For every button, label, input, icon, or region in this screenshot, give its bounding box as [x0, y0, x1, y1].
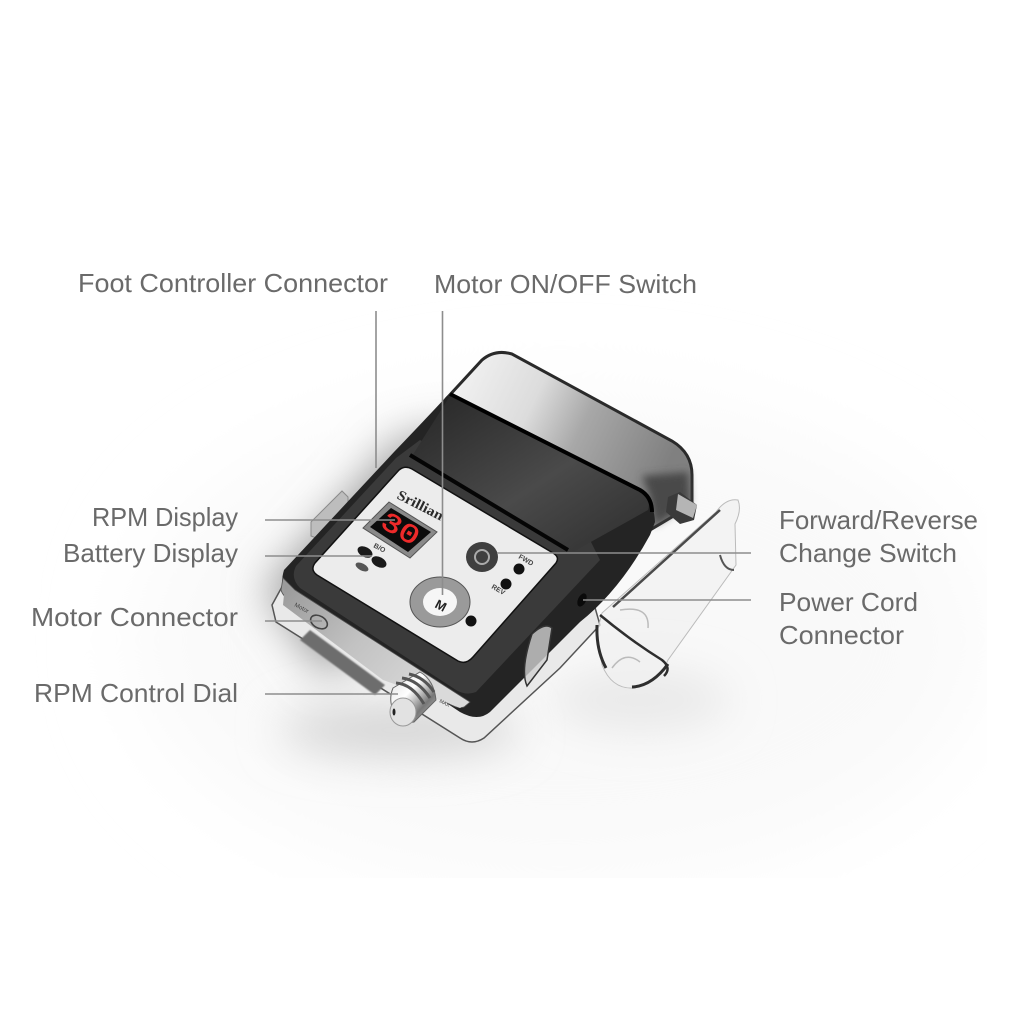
faceplate	[313, 467, 557, 662]
label: rpm display: RPM Display	[92, 502, 238, 532]
label: power cord connector	[779, 587, 918, 650]
rpm control dial	[390, 672, 451, 726]
rpm display: 30	[374, 508, 424, 554]
label: power cord connector: Power Cord	[779, 587, 918, 617]
leader lines	[265, 311, 751, 694]
battery display	[354, 543, 388, 573]
panel groove	[450, 394, 652, 512]
lower shell dark shadow band	[300, 630, 385, 695]
forward reverse switch: FWD	[517, 554, 534, 568]
label: battery display: Battery Display	[63, 538, 238, 568]
back shell dark side	[642, 472, 690, 525]
label: foot controller connector: Foot Controller Connector	[78, 268, 388, 298]
battery display: B/O	[372, 543, 387, 555]
motor connector: Motor	[293, 602, 309, 615]
rpm display	[363, 502, 437, 558]
left side tab	[311, 491, 348, 540]
power cord socket	[575, 592, 589, 608]
frame bevel	[294, 440, 600, 694]
foot controller socket	[666, 492, 697, 524]
motor button	[410, 577, 476, 627]
rpm control dial: MAX	[438, 698, 451, 709]
clear lower shell	[272, 585, 600, 742]
silver front lower face	[283, 584, 466, 708]
forward reverse switch: REV	[490, 584, 506, 597]
motor connector	[293, 602, 330, 632]
main dark body	[282, 396, 655, 717]
background glow and shadow	[235, 402, 744, 788]
motor button: M	[433, 596, 449, 615]
clear back shell	[447, 352, 692, 530]
label: rpm control dial: RPM Control Dial	[34, 678, 238, 708]
logo: Srillian	[394, 488, 446, 524]
silver front face	[281, 578, 470, 708]
label: motor connector: Motor Connector	[31, 602, 238, 632]
device	[272, 352, 739, 742]
label: forward/reverse change switch: Change Switch	[779, 538, 957, 568]
label: forward/reverse change switch: Forward/Reverse	[779, 505, 978, 535]
label: forward/reverse change switch	[779, 505, 978, 568]
black top panel	[412, 396, 649, 551]
side clip	[524, 500, 739, 688]
label: power cord connector: Connector	[779, 620, 904, 650]
forward reverse switch	[466, 542, 534, 597]
label: motor on/off switch: Motor ON/OFF Switch	[434, 269, 697, 299]
panel lower edge	[410, 455, 568, 550]
